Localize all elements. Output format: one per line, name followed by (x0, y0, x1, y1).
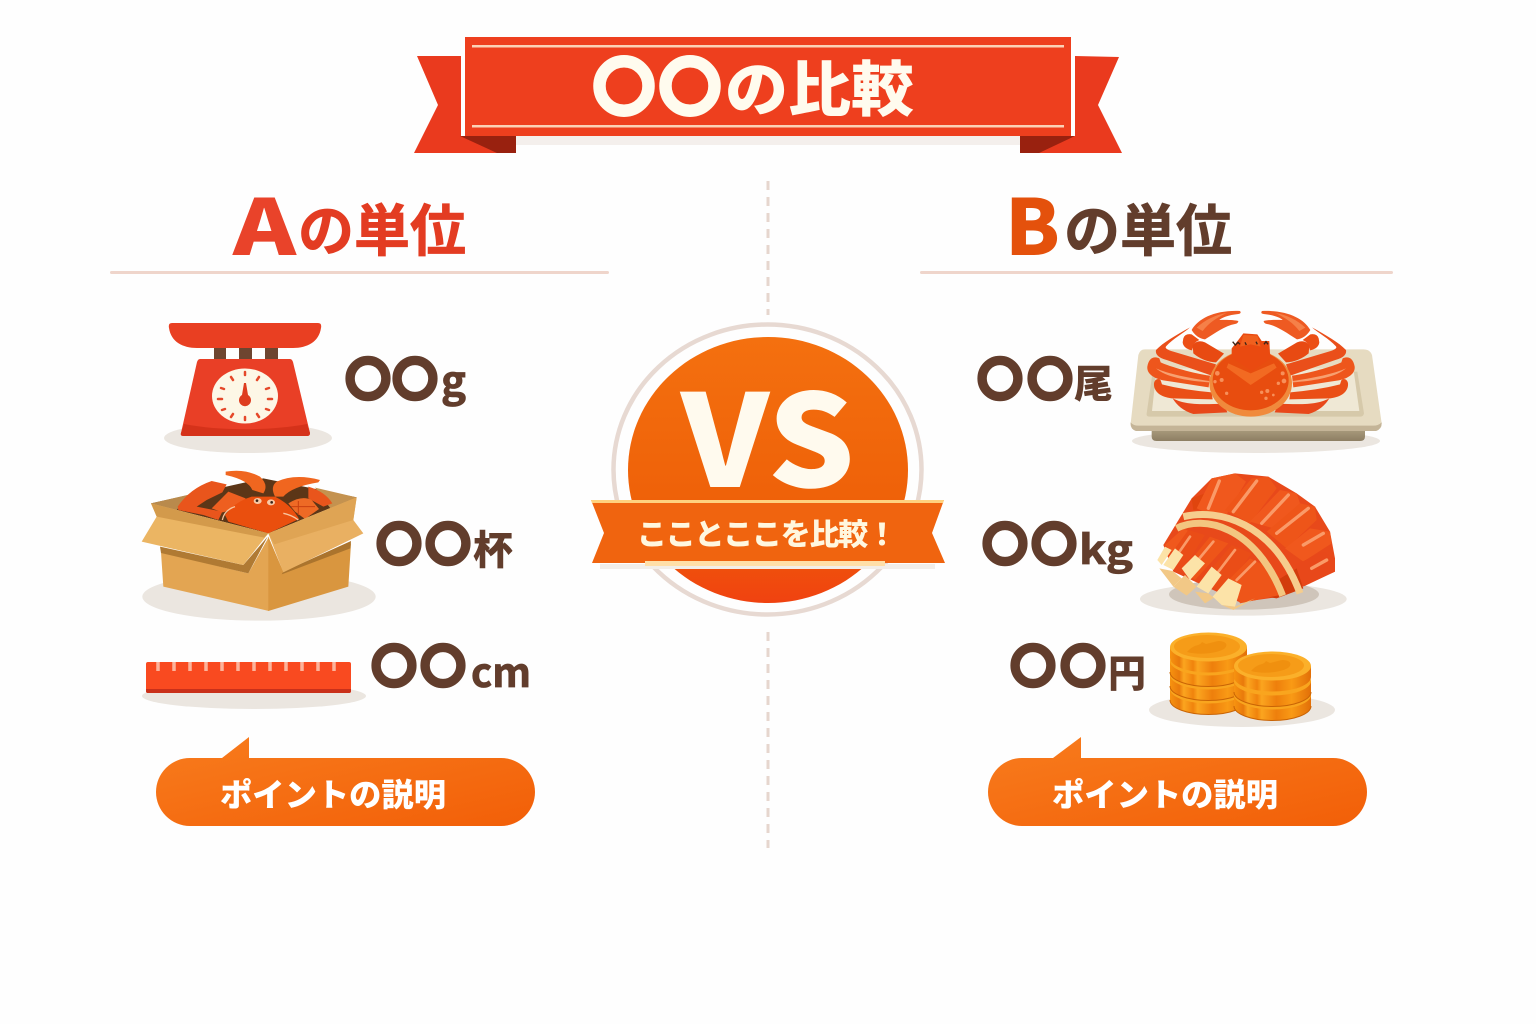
title text: の比較 (725, 42, 914, 129)
box body (161, 537, 269, 611)
panel: A units (110, 167, 609, 826)
title banner (414, 37, 1122, 153)
panel: B units (920, 167, 1393, 826)
value: g (345, 344, 466, 410)
value: tails: 〇 (977, 344, 1023, 410)
value: cm: 〇 (371, 631, 417, 697)
heading: B: の単位 (1064, 187, 1232, 268)
value: g: g (441, 348, 466, 409)
icon: bundle of crab legs (1140, 473, 1347, 616)
ribbon: こことここを比較！ (637, 510, 897, 554)
heading: A: A (232, 167, 297, 278)
VS badge (591, 324, 945, 614)
title text (592, 38, 914, 129)
callout: point B: ポイントの説明 (1052, 770, 1278, 816)
banner body (461, 38, 1075, 135)
value: cups: 杯 (473, 518, 513, 576)
left flap (142, 503, 268, 565)
value: yen: 〇 (1010, 631, 1056, 697)
icon: crab on a tray (1131, 311, 1382, 453)
value: yen: 円 (1108, 643, 1146, 698)
value: cm: 〇 (420, 631, 466, 697)
VS text: VS (679, 339, 855, 524)
icon: cardboard box of crabs (142, 471, 376, 621)
crab shell (1209, 350, 1292, 417)
title text: 〇 (658, 38, 722, 129)
value: tails: 〇 (1027, 344, 1073, 410)
value: cm (371, 631, 531, 699)
heading: B: B (1005, 167, 1060, 278)
title text: 〇 (592, 38, 656, 129)
crabs in the box (178, 471, 332, 533)
back row of legs (1192, 473, 1335, 598)
callout: point B (988, 737, 1367, 826)
right ribbon tail (1020, 56, 1122, 153)
value: cups (376, 509, 513, 576)
right flap (268, 497, 363, 572)
value: g: 〇 (345, 344, 391, 410)
value: kg: 〇 (982, 509, 1028, 575)
cream leg ends (1157, 547, 1255, 610)
callout: point A: ポイントの説明 (220, 770, 446, 816)
bundle bands (1177, 523, 1283, 596)
left ribbon tail (414, 56, 516, 153)
value: tails: 尾 (1074, 354, 1113, 410)
icon: stacked coins (1149, 632, 1335, 727)
value: cups: 〇 (425, 509, 471, 575)
heading: B (920, 167, 1393, 278)
value: g: 〇 (392, 344, 438, 410)
right stack (1234, 652, 1311, 720)
icon: ruler (142, 662, 366, 709)
front row of legs (1165, 528, 1280, 603)
value: kg (982, 509, 1133, 576)
icon: kitchen scale (164, 323, 332, 453)
callout: point A (156, 737, 535, 826)
value: yen: 〇 (1060, 631, 1106, 697)
outer ring (614, 324, 922, 614)
value: cm: cm (471, 641, 531, 699)
value: cups: 〇 (376, 509, 422, 575)
value: tails (977, 344, 1113, 410)
heading: A (110, 167, 609, 278)
value: kg: 〇 (1031, 509, 1077, 575)
center dashed divider (766, 181, 770, 848)
circle (628, 337, 908, 603)
heading: A: の単位 (298, 187, 466, 268)
left stack (1170, 632, 1247, 714)
value: kg: kg (1079, 518, 1133, 576)
crab legs and claws (1147, 311, 1355, 414)
value: yen (1010, 631, 1146, 698)
ribbon (591, 500, 945, 569)
